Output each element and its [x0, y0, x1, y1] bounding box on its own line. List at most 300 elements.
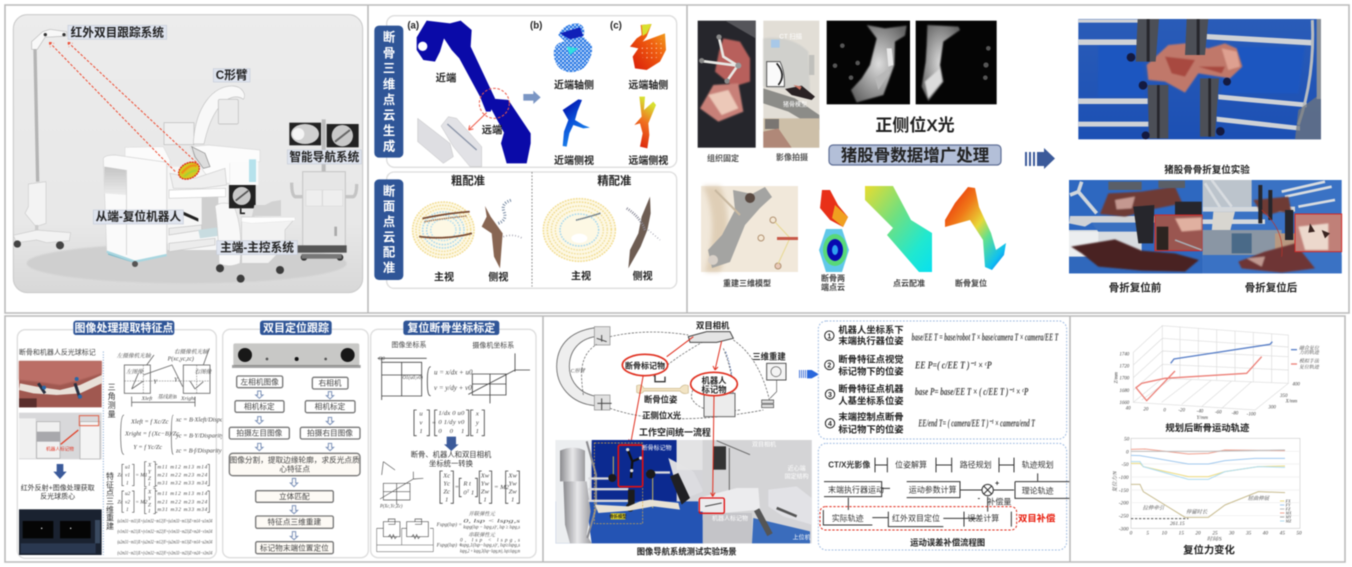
- chart: binocular triangulation diagram: Y: [174, 377, 179, 384]
- icon: slave reduction robot: [103, 145, 260, 267]
- text: triangulation side label: 测: [108, 401, 116, 410]
- text: reconstruction side label: 点: [106, 489, 114, 498]
- chart: reduction force: 40: [1263, 530, 1268, 536]
- text: transform caption: 断骨、机器人和双目相机: [411, 450, 492, 459]
- legend: force channels: FY: [1285, 502, 1291, 507]
- text: end point cloud caption: 断骨两: [821, 273, 845, 283]
- callout: fracture marker: 断骨标记物: [625, 360, 665, 370]
- text: triangulation formulas: xc = B·Xleft/Disparity: [175, 417, 232, 424]
- flowchart: tracking steps: 左相机图像: [241, 376, 279, 386]
- item: visual marker pose: 标记物下的位姿: [838, 366, 904, 377]
- text: reconstruction matrices: Z: [148, 503, 151, 509]
- panel: reduction coordinate calibration: [371, 321, 536, 558]
- text: flowchart labels: 末端执行器运动: [828, 485, 884, 495]
- photo: image acquisition: 猪骨模型: [783, 101, 807, 109]
- chart: reduction force: [1112, 436, 1302, 543]
- icon: red connectors: [629, 337, 722, 443]
- text: reflect process: 红外反射+图像处理获取: [21, 483, 95, 492]
- text: reconstruction matrices: = M1: [135, 473, 148, 479]
- text: camera coordinate label: 摄像机坐标系: [472, 341, 514, 350]
- text: elastic segment formulas: kspg(lsp − lspg,s)ᶜ, lsp ≥ lspg,s: [463, 523, 520, 530]
- text: diagram labels: 正侧位X光: [642, 411, 682, 421]
- chart: reduction force: 停留时长: [1186, 508, 1208, 515]
- chart: 3D trajectory: 300: [1268, 405, 1276, 410]
- text: elastic segment formulas: kspg,2 + kspg,3(lsp−lspg,m), lsp≥lspg,m: [460, 547, 520, 554]
- chart: image coordinate grid: O0: [378, 356, 385, 362]
- photo: reconstructed 3D model: [701, 186, 798, 272]
- chart: reduction force: 25: [1212, 530, 1218, 536]
- labels: point cloud views: 近端轴侧: [554, 79, 594, 92]
- chart: binocular triangulation diagram: 左摄像机光轴: [117, 353, 152, 360]
- photos: reduction experiment: [1069, 19, 1342, 273]
- item: robot frame pose: 机器人坐标系下: [838, 324, 904, 335]
- label: navigation system: 智能导航系统: [289, 150, 360, 164]
- callout: robot marker: [691, 372, 737, 396]
- icon: lower red connector: [711, 395, 715, 497]
- photo: experiment scene: 双目相机: [752, 441, 776, 449]
- photo: experiment scene: 近心端: [788, 464, 806, 472]
- labels: registration views: 侧视: [633, 270, 653, 283]
- text: flowchart labels: 运动参数计算: [909, 485, 957, 495]
- text: triangulation side label: 角: [108, 391, 116, 401]
- text: elastic segment formulas: 并联弹性元: [468, 511, 496, 518]
- icon: stereo camera bar: [688, 332, 733, 342]
- chart: 3D trajectory: -40: [1197, 410, 1204, 415]
- labels: point cloud views: 近端侧视: [554, 154, 594, 167]
- text: flowchart labels: 位姿解算: [895, 460, 927, 470]
- text: pixel matrix: 1: [419, 428, 423, 435]
- item: end control pose: [825, 411, 1035, 434]
- text: diagram labels: [642, 320, 786, 421]
- item: robot frame pose: 1: [827, 333, 831, 340]
- text: elastic segment formulas: 0, lsp < lspg,s: [460, 538, 520, 544]
- photo: after reduction: [1203, 180, 1342, 273]
- photo: image acquisition: CT 扫描: [779, 31, 803, 40]
- photo: lateral X-ray: [916, 21, 997, 104]
- chart: proximal side cloud: [563, 99, 590, 147]
- tab: binocular tracking heading: 双目定位跟踪: [263, 321, 329, 335]
- chart: 3D trajectory: 0: [1163, 409, 1166, 414]
- text: transform matrix: = M2: [494, 484, 510, 491]
- chart: reduction force: -50: [1121, 462, 1129, 468]
- text: elastic segment formulas: Fspg(lsp) =: [436, 521, 462, 528]
- label: C-arm: C形臂: [216, 68, 248, 82]
- chart: binocular triangulation diagram: Xright: [180, 396, 196, 402]
- chart: fracture reduction result: [945, 187, 1006, 270]
- text: reconstruction matrices: u1: [125, 464, 131, 470]
- chart: reduction force: 30: [1229, 530, 1235, 536]
- chart: 3D trajectory: 1720: [1119, 364, 1130, 369]
- text: triangulation formulas: [121, 415, 232, 454]
- panel: image feature extraction: [17, 321, 232, 558]
- chart: fine front view: [543, 198, 616, 262]
- photo: experiment scene: 骨折模型: [609, 513, 627, 520]
- flowchart: tracking steps: 心特征点: [279, 464, 310, 474]
- item: robot frame pose: base/EE T = base/robot T × base/camera T × camera/EE T: [912, 332, 1059, 343]
- text: reconstruction matrices: Zc: [117, 473, 123, 479]
- text: pixel matrix: =: [432, 420, 436, 427]
- flowchart: tracking steps: [229, 376, 360, 554]
- text: flowchart labels: 理论轨迹: [1022, 485, 1054, 495]
- text: flowchart labels: 路径规划: [960, 460, 992, 470]
- item: robot base pose: [825, 383, 1029, 406]
- text: flowchart labels: CT/X光影像: [828, 460, 870, 470]
- chart: fracture end point clouds: [819, 190, 849, 272]
- sub-panel: fracture point cloud: [374, 16, 677, 167]
- text: reconstruction matrices: = M2: [135, 499, 148, 505]
- flowchart: tracking steps: 图像分割，提取边缘轮廓，求反光点质: [230, 455, 360, 465]
- chart: binocular triangulation diagram: 左图像: [126, 368, 144, 375]
- text: reflect process: 反光球质心: [40, 491, 75, 500]
- chart: 3D trajectory: -100: [1247, 413, 1256, 418]
- chart: coarse front view: [412, 202, 475, 258]
- text: binocular compensation: 双目补偿: [1018, 513, 1056, 524]
- text: image coordinate label: 图像坐标系: [392, 340, 426, 349]
- tab: generation title: 生: [383, 123, 395, 138]
- text: reconstruction side label: 特: [106, 471, 114, 481]
- labels: point cloud views: 远端轴侧: [628, 79, 668, 92]
- heading: coarse registration: 粗配准: [451, 173, 485, 187]
- flowchart: tracking steps: 相机标定: [244, 401, 275, 411]
- chart: 3D trajectory: 40: [1126, 406, 1131, 411]
- text: triangulation formulas: Y = f Yc/Zc: [133, 444, 162, 451]
- text: reconstruction matrices: 1: [126, 480, 129, 486]
- tab: registration title: 准: [383, 260, 395, 275]
- chart: reduction force: 10: [1162, 530, 1167, 536]
- chart: workspace unification diagram: [557, 320, 786, 443]
- flowchart: tracking steps: 相机标定: [315, 401, 346, 411]
- heading: post-planning trajectory: 规划后断骨运动轨迹: [1165, 422, 1250, 433]
- text: reconstruction matrices: X: [147, 489, 152, 495]
- chart: world camera grid: P(Xc,Yc,Zc): [379, 505, 403, 510]
- legend: trajectories: 模拟手法: [1299, 358, 1320, 365]
- item: robot frame pose: [825, 324, 1059, 346]
- labels: femur: [436, 72, 502, 136]
- chart: binocular triangulation diagram: Xleft: [141, 395, 153, 402]
- tab: registration title: 点: [383, 214, 395, 229]
- arrow: experiment flow: [1025, 148, 1055, 169]
- text: flowchart labels: [828, 460, 1054, 523]
- chart: reduction force: 0: [1126, 449, 1129, 455]
- text: transform matrix: Yw: [509, 481, 517, 488]
- text: transform matrix: 1: [511, 497, 514, 504]
- photo: robot with marker box: [19, 413, 102, 459]
- sub-panel: section point cloud registration: [374, 172, 677, 288]
- text: pixel matrix: x: [475, 411, 479, 418]
- text: tissue fixation caption: 组织固定: [707, 153, 739, 163]
- heading: reduction force variation: 复位力变化: [1183, 544, 1235, 557]
- labels: registration views: 主视: [571, 270, 591, 283]
- chart: 3D trajectory: 1680: [1119, 389, 1130, 394]
- tab: generation title: [374, 26, 403, 158]
- sub-panel: compensation flowchart: [818, 443, 1069, 550]
- text: pixel matrix: [414, 410, 484, 436]
- photo: experiment scene: 断骨标记物: [642, 444, 672, 452]
- chart: 3D trajectory: [1115, 326, 1320, 421]
- text: reconstruction matrices: 1: [126, 507, 129, 513]
- chart: 3D trajectory: 1660: [1119, 401, 1130, 406]
- panel: pose formulas and compensation flow: [799, 321, 1069, 550]
- callout: robot marker: 标记物: [701, 384, 727, 394]
- chart: reduction force: 复位力/N: [1112, 471, 1119, 492]
- photo: image acquisition: [763, 21, 819, 148]
- text: elastic segment formulas: [436, 511, 520, 554]
- labels: registration views: 侧视: [488, 270, 508, 283]
- photo: reduction experiment setup: [1078, 19, 1321, 139]
- text: transform matrix: [440, 471, 519, 504]
- text: diagram labels: 双目相机: [696, 320, 730, 330]
- labels: femur: 远端: [482, 123, 502, 136]
- item: visual marker pose: 2: [827, 363, 831, 370]
- legend: trajectories: 融合复位: [1299, 344, 1320, 351]
- text: triangulation formulas: yc = B·Y/Disparity: [175, 432, 224, 439]
- labels: panel letters: (c): [610, 20, 622, 31]
- text: flowchart labels: 轨迹规划: [1022, 460, 1054, 470]
- legend: trajectories: 复位轨迹: [1299, 363, 1320, 370]
- text: reconstruction matrices: 1: [148, 508, 151, 514]
- text: coordinate formulas: [434, 368, 473, 392]
- chart: reduction force: -150: [1119, 488, 1129, 494]
- text: transform matrix: Zw: [509, 489, 517, 496]
- text: reconstruction matrices: (v2m31−m21)X+(v2m32−m22)Y+(v2m33−m23)Z=m24−v2m34: [117, 549, 213, 556]
- chart: 3D trajectory: 1700: [1119, 377, 1130, 382]
- chart: reduction force: 5: [1146, 530, 1149, 536]
- text: pixel matrix: y: [475, 419, 479, 426]
- text: reconstruction matrices: Z: [148, 476, 151, 482]
- text: transform matrix: Xc: [442, 473, 450, 480]
- icon: infrared tracker on stand: [13, 29, 71, 249]
- text: reconstruction matrices: m11 m12 m13 m14: [157, 491, 208, 497]
- text: transform caption: 坐标统一转换: [429, 459, 474, 468]
- flowchart: tracking steps: 立体匹配: [279, 491, 310, 501]
- chart: image coordinate grid: [378, 356, 431, 400]
- icon: smart navigation cart: [289, 119, 359, 261]
- chart: hysteresis circuit: [377, 519, 433, 552]
- photo: reflective markers: [19, 361, 102, 407]
- panel: point cloud generation and registration: [374, 16, 677, 288]
- text: registration caption: 点云配准: [893, 278, 925, 288]
- text: elastic segment formulas: Fspg(lsp) =: [436, 541, 462, 548]
- arrow: to point clouds: [523, 91, 541, 104]
- text: reconstruction matrices: Zc: [117, 499, 123, 505]
- tab: generation title: 骨: [383, 46, 395, 60]
- text: elastic segment formulas: 串联弹性元: [468, 531, 496, 538]
- text: transform matrix: Xw: [480, 473, 490, 480]
- legend: trajectories: 力的轨迹: [1299, 349, 1320, 356]
- text: end point cloud caption: 端点云: [821, 282, 845, 292]
- chart: 3D trajectory: -80: [1232, 411, 1239, 416]
- labels: femur: 近端: [436, 72, 456, 85]
- text: workspace caption: 工作空间统一流程: [639, 427, 711, 438]
- tab: image feature heading: 图像处理提取特征点: [75, 321, 173, 335]
- text: reconstruction matrices: (u2m31−m11)X+(u2m32−m12)Y+(u2m33−m13)Z=m14−u2m34: [117, 539, 213, 546]
- text: flowchart labels: +: [995, 479, 999, 488]
- flowchart: tracking steps: 拍摄右目图像: [307, 428, 353, 438]
- chart: reduction force: 261.15: [1170, 521, 1185, 527]
- labels: panel letters: [407, 20, 622, 31]
- text: reconstruction matrices: m21 m22 m23 m24: [157, 499, 208, 505]
- panel: binocular tracking flow: [223, 321, 368, 558]
- tab: calibration heading: 复位断骨坐标标定: [407, 321, 495, 335]
- panel: surgical robot system overview: [13, 15, 363, 293]
- text: reduction caption: 断骨复位: [955, 278, 987, 288]
- chart: workspace unification diagram: C形臂: [571, 367, 586, 374]
- chart: 3D trajectory: -20: [1178, 409, 1185, 414]
- flowchart: tracking steps: 标记物末端位置定位: [260, 542, 329, 552]
- chart: 3D trajectory: 400: [1292, 383, 1300, 388]
- chart: binocular triangulation diagram: 右摄像机光轴: [174, 348, 209, 355]
- photo: tissue fixation: [698, 21, 756, 148]
- panel: navigation system test: [556, 320, 812, 557]
- chart: reduction force: 屈曲伸展: [1248, 495, 1270, 502]
- text: transform matrix: =: [455, 484, 459, 491]
- tab: generation title: 云: [383, 108, 395, 122]
- chart: binocular triangulation diagram: 基线距B: [157, 393, 177, 400]
- item: end control pose: 末端控制点断骨: [838, 411, 904, 422]
- text: transform matrix: 1: [483, 497, 487, 504]
- text: triangulation formulas: Xleft = f Xc/Zc: [130, 418, 169, 425]
- tab: generation title: 维: [383, 76, 395, 91]
- tab: generation title: 三: [383, 62, 395, 76]
- text: reconstruction matrices: m31 m32 m33 m34: [157, 507, 208, 513]
- chart: image coordinate grid: O1(u0,v0): [402, 376, 423, 381]
- text: coordinate formulas: v = y/dy + v0: [434, 384, 472, 392]
- legend: force channels: FX: [1285, 498, 1291, 503]
- photo: experiment scene: 机器人标记物: [712, 515, 748, 523]
- panel: porcine femur experiment: [698, 19, 1342, 294]
- sub-panel: pose formulas: [818, 321, 1067, 439]
- chart: 3D trajectory: -60: [1215, 411, 1222, 416]
- chart: 3D trajectory: X/mm: [1285, 399, 1298, 404]
- item: end control pose: EE/end T= ( camera/EE T )⁻¹ × camera/end T: [918, 418, 1035, 429]
- label: infrared tracking: 红外双目跟踪系统: [71, 25, 164, 39]
- text: reconstruction side label: 维: [106, 504, 114, 514]
- panel: trajectory and reduction force charts: [1112, 326, 1320, 557]
- photo: experiment scene: 固定结构: [785, 473, 809, 481]
- text: pixel matrix: 1/dx 0 u0: [438, 410, 465, 417]
- chart: 3D trajectory: Y/mm: [1197, 416, 1208, 421]
- chart: world camera grid: [379, 462, 423, 510]
- text: transform matrix: 0ᵀ 1: [463, 489, 474, 496]
- chart: reduction force: 时间/S: [1207, 536, 1222, 543]
- item: end control pose: 4: [828, 421, 832, 428]
- flowchart: tracking steps: 特征点三维重建: [268, 517, 321, 527]
- text: diagram labels: 三维重建: [752, 352, 786, 362]
- tab: registration title: 断: [383, 183, 395, 198]
- chart: blue femur model: [417, 21, 531, 163]
- chart: reduction force: -250: [1119, 514, 1129, 520]
- text: triangulation formulas: zc = B·f/Disparity: [175, 447, 222, 454]
- text: after reduction caption: 骨折复位后: [1245, 281, 1298, 294]
- arrow: image to result: [53, 464, 67, 479]
- icon: fracture marker highlight: [176, 159, 202, 183]
- chart: reduction force: 20: [1195, 530, 1201, 536]
- text: reconstruction matrices: m31 m32 m33 m34: [157, 480, 208, 486]
- text: reconstruction matrices: v1: [125, 473, 130, 479]
- item: robot base pose: 断骨特征点机器: [838, 383, 904, 394]
- photos: specimen and X-ray: [698, 21, 997, 148]
- chart: proximal axial cloud: [554, 23, 592, 72]
- text: flowchart caption: 运动误差补偿流程图: [910, 537, 985, 547]
- chart: 3D trajectory: 1740: [1119, 352, 1130, 357]
- text: triangulation formulas: Xright = f (Xc−B)/Zc: [124, 431, 179, 438]
- text: reconstructed model caption: 重建三维模型: [723, 278, 771, 288]
- arrow: unify transform: [444, 437, 459, 451]
- chart: binocular triangulation diagram: [117, 348, 213, 407]
- chart: reduction force: -300: [1119, 526, 1129, 532]
- photo: robot with marker box: 机器人标记物: [46, 445, 74, 452]
- labels: point cloud views: 远端侧视: [628, 154, 668, 167]
- text: pixel matrix: v: [420, 419, 423, 426]
- chart: reduction force: 50: [1296, 530, 1302, 536]
- photo: frontal X-ray: [827, 21, 910, 104]
- heading: frontal and lateral X-ray: 正侧位X光: [875, 115, 955, 135]
- text: triangulation side label: 量: [108, 410, 116, 419]
- legend: force channels: MZ: [1285, 518, 1292, 523]
- item: robot base pose: 人基坐标系位姿: [838, 395, 904, 406]
- text: reconstruction matrices: [117, 462, 213, 556]
- flowchart: tracking steps: 右相机: [319, 378, 342, 388]
- text: marker caption: 断骨和机器人反光球标记: [19, 348, 96, 357]
- text: flowchart labels: 红外双目定位: [892, 513, 940, 523]
- callout: fracture marker: [622, 354, 668, 376]
- photo: experiment scene: 上位机: [793, 533, 811, 541]
- labels: registration views: [434, 270, 653, 283]
- arrow: to formula panel: [799, 370, 819, 378]
- text: pixel matrix: 1: [476, 428, 479, 435]
- text: reconstruction matrices: (v1m31−m21)X+(v1m32−m22)Y+(v1m33−m23)Z=m24−v1m34: [117, 528, 213, 535]
- chart: fine side view: [627, 197, 660, 268]
- tab: registration title: 配: [383, 246, 396, 260]
- legend: force channels: MX: [1285, 510, 1292, 515]
- icon: binocular camera: [232, 343, 361, 368]
- text: transform matrix: 1: [445, 497, 448, 504]
- text: elastic segment formulas: 0, lsp < lspg,s: [463, 518, 520, 524]
- flowchart: compensation steps: [823, 458, 1069, 527]
- text: reconstruction matrices: 1: [148, 482, 151, 488]
- text: reconstruction side label: 重: [106, 513, 114, 523]
- text: reconstruction side label: 建: [106, 521, 114, 531]
- photo: before reduction: [1069, 180, 1203, 273]
- tab: data augmentation: 猪股骨数据增广处理: [841, 146, 990, 165]
- text: reconstruction matrices: X: [147, 463, 152, 469]
- icon: bone: [637, 385, 688, 394]
- chart: reduction force: 15: [1179, 530, 1184, 536]
- chart: 3D trajectory: Z/mm: [1115, 372, 1120, 383]
- text: reconstruction matrices: Y: [148, 496, 152, 502]
- text: transform matrix: Xw: [507, 473, 517, 480]
- labels: point cloud views: [554, 79, 668, 167]
- legend: force channels: MY: [1285, 514, 1292, 519]
- chart: reduction force: 0: [1130, 530, 1133, 536]
- text: reconstruction matrices: u2: [125, 491, 131, 497]
- labels: panel letters: (a): [407, 20, 419, 31]
- item: end control pose: 标记物下的位姿: [838, 423, 904, 434]
- callout: fracture zoom: [418, 88, 509, 167]
- chart: binocular triangulation diagram: P(xc,yc,zc): [167, 355, 194, 362]
- chart: point cloud registration: [865, 186, 932, 272]
- photo: tracking software: [19, 509, 102, 555]
- tab: generation title: 成: [383, 139, 395, 154]
- photo: experiment scene: [556, 440, 812, 543]
- text: reconstruction matrices: (u1m31−m11)X+(u1m32−m12)Y+(u1m33−m13)Z=m14−u1m34: [117, 517, 213, 524]
- item: robot frame pose: 末端执行器位姿: [838, 335, 904, 346]
- icon: master console: [215, 185, 295, 283]
- text: elastic segment formulas: kspg,1(lsp−lspg,s)ᶜ, lsp≥lspg,s: [460, 542, 520, 549]
- tab: registration title: 云: [383, 230, 395, 244]
- chart: distal axial cloud: [630, 24, 666, 70]
- chart: distal side cloud: [634, 97, 656, 148]
